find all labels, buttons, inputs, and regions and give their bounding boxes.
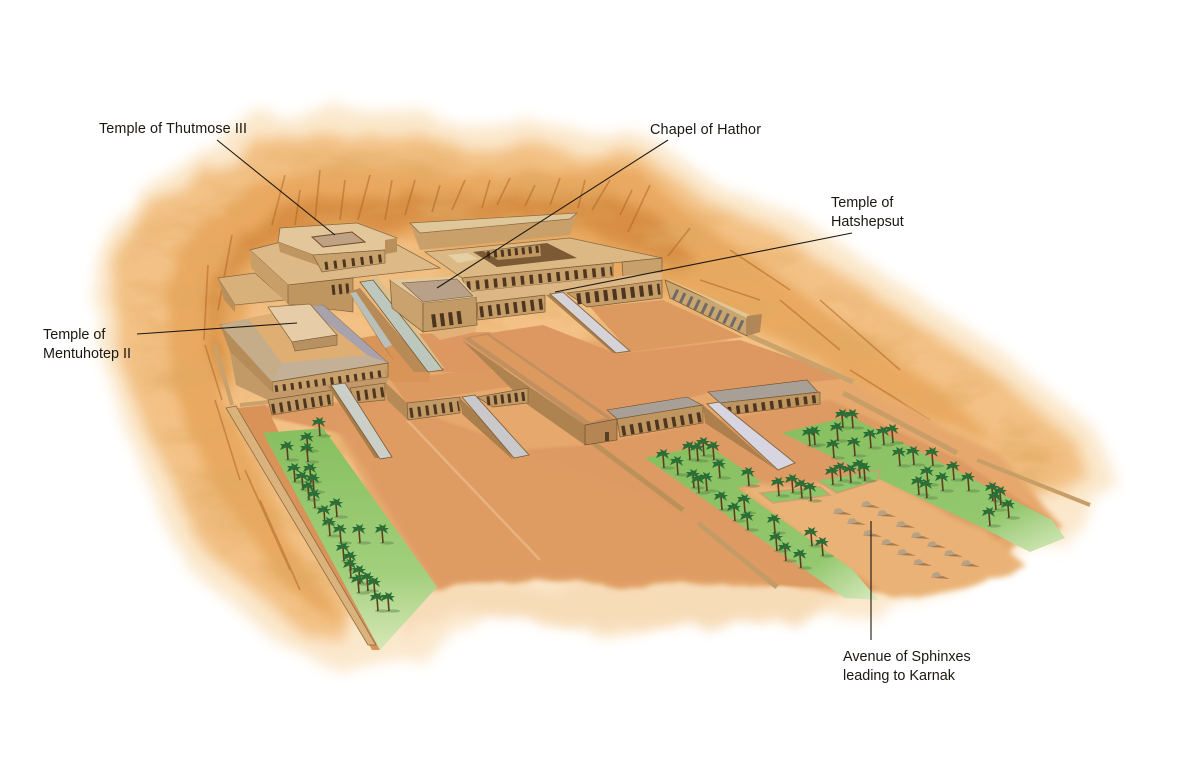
leader lines [137,140,871,640]
sloping left side [220,325,273,393]
rooftop block [268,304,337,342]
chapel of Hathor block [390,276,477,332]
label: Avenue of Sphinxes leading to Karnak: leading to Karnak [843,668,956,684]
palm trees [280,409,1020,613]
upper colonnade [272,363,388,393]
right garden lawn [782,416,1065,552]
label: Chapel of Hathor: Chapel of Hathor [650,122,761,138]
label: Temple of Mentuhotep II: Temple of [43,327,105,343]
middle terrace colonnades [385,382,529,460]
temple: Hatshepsut [410,213,762,353]
lower colonnades and ramp [607,380,820,470]
ramp walls and causeway [462,333,617,445]
rock texture [130,145,1070,620]
side colonnade [665,280,747,336]
lower terrace [250,238,440,285]
ramp [328,384,380,458]
label: Temple of Thutmose III: Temple of Thutmose III [99,121,247,137]
upper block [278,223,397,255]
upper courtyard floors [350,300,850,560]
temple: Mentuhotep II [220,304,392,459]
label: Temple of Mentuhotep II: Mentuhotep II [43,346,131,362]
upper right colonnade [567,280,662,307]
temple: Thutmose III [218,223,440,312]
roof [312,232,365,247]
rock fissures [204,170,960,590]
inner terrace [248,307,367,363]
avenue of sphinxes statues [833,501,980,579]
middle garden lawn [645,445,878,600]
middle colonnade [477,295,545,320]
side walls of the valley [215,335,1090,650]
central ramp [348,276,444,372]
label: Avenue of Sphinxes leading to Karnak: Avenue of Sphinxes [843,649,971,665]
upper terrace [425,238,662,278]
middle terrace [467,272,662,303]
panel: gardens [263,416,1065,650]
cliff and desert base [98,106,1112,675]
label: Temple of Hatshepsut: Hatshepsut [831,214,904,230]
causeway guide line [407,420,540,560]
small garden plots [817,470,880,493]
upper colonnade [462,263,613,292]
upper ramp [546,294,627,353]
desert floor [238,330,1060,640]
back wall [410,213,577,250]
sloped outer terrace [220,305,388,382]
left garden lawn [263,428,437,650]
low terrace at left [218,273,285,305]
inner court [473,243,577,267]
lower colonnades [268,390,333,415]
label: Temple of Hatshepsut: Temple of [831,195,893,211]
